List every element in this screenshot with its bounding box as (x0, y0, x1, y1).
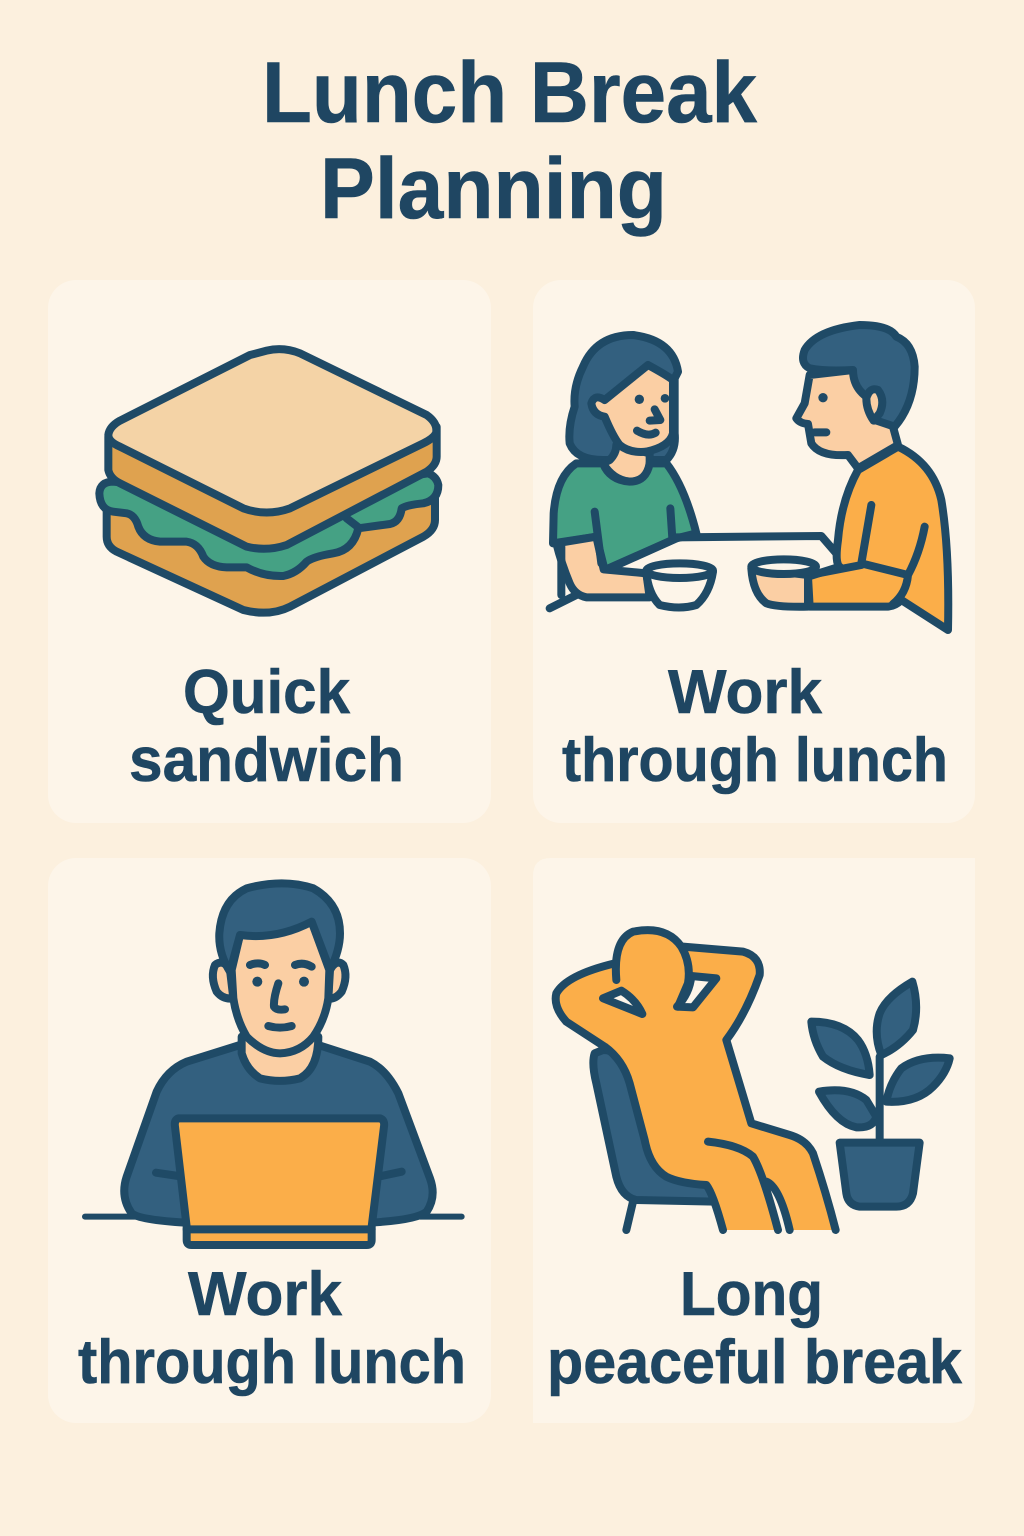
title: Lunch Break (262, 45, 757, 141)
label: work through lunch (top): Work (668, 658, 823, 727)
label: quick sandwich: Quick (183, 658, 350, 727)
label: work through lunch (bottom): Work (188, 1260, 343, 1329)
neck (242, 1037, 318, 1081)
panel: quick sandwich (48, 280, 491, 823)
table line (85, 1208, 462, 1226)
arm lines (156, 1172, 402, 1176)
icon: man at laptop (85, 883, 462, 1245)
label: long peaceful break: peaceful break (547, 1328, 962, 1397)
panel: two people at lunch (533, 280, 975, 823)
label: quick sandwich (129, 658, 404, 795)
woman (550, 335, 696, 608)
torso (124, 1045, 433, 1223)
panel: long peaceful break (533, 858, 975, 1423)
plant (811, 982, 950, 1207)
man (796, 325, 948, 630)
bowl right (751, 559, 816, 607)
facial features (250, 963, 312, 1028)
chair (593, 1050, 715, 1230)
bowl left (646, 563, 713, 607)
label: work through lunch (top): through lunch (562, 726, 948, 795)
label: long peaceful break: Long (680, 1260, 823, 1329)
icon: relaxing person and plant (556, 928, 950, 1230)
label: long peaceful break (547, 1260, 962, 1397)
label: work through lunch (top) (562, 658, 948, 795)
label: work through lunch (bottom) (78, 1260, 466, 1397)
icon: two people eating at a table (550, 325, 948, 630)
person (556, 928, 836, 1230)
label: quick sandwich: sandwich (129, 726, 404, 795)
ears (213, 963, 345, 999)
title (262, 45, 757, 237)
face (232, 922, 329, 1053)
table (610, 536, 836, 568)
title: Planning (320, 141, 667, 237)
icon: sandwich (99, 349, 438, 613)
panel: working at laptop (48, 858, 491, 1423)
hair (219, 883, 340, 972)
label: work through lunch (bottom): through lunch (78, 1328, 466, 1397)
laptop (175, 1118, 384, 1245)
